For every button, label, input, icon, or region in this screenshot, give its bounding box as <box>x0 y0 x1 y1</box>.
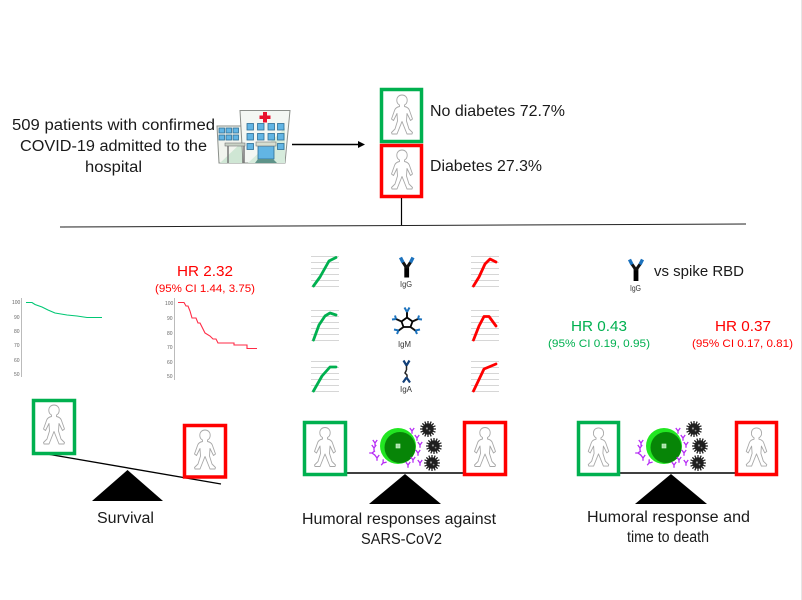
survival chart: diabetes: 50 <box>167 374 173 380</box>
hazard ratio: survival <box>155 263 255 295</box>
caption: survival: Survival <box>97 510 154 527</box>
patient box: diabetes <box>382 146 422 196</box>
survival chart: diabetes: 70 <box>167 345 173 351</box>
icon: IgA antibody: IgA <box>400 385 413 394</box>
icon: hospital <box>217 110 290 163</box>
connector lines <box>60 198 746 227</box>
hazard ratio: diabetes: HR 0.37 <box>715 318 771 335</box>
icon: IgA antibody <box>400 360 413 394</box>
intro text: patient cohort: hospital <box>85 159 142 176</box>
survival chart: no diabetes: 100 <box>12 300 21 306</box>
icon: IgG vs spike RBD <box>630 260 642 293</box>
arrow: to patient groups <box>292 141 365 148</box>
survival chart: no diabetes <box>12 298 102 378</box>
intro text: patient cohort: COVID-19 admitted to the <box>20 138 207 155</box>
hazard ratio: no diabetes: (95% CI 0.19, 0.95) <box>548 338 650 350</box>
seesaw: time to death <box>578 421 776 504</box>
survival chart: diabetes: 60 <box>167 360 173 366</box>
hazard ratio: survival: HR 2.32 <box>177 263 233 280</box>
icon: IgG antibody <box>400 258 413 289</box>
icon: IgG antibody: IgG <box>400 280 412 289</box>
sparklines: diabetes <box>471 256 499 392</box>
hazard ratio: diabetes <box>692 318 793 350</box>
label: no diabetes share: No diabetes 72.7% <box>430 103 565 120</box>
hazard ratio: no diabetes <box>548 318 650 350</box>
icon: IgM antibody: IgM <box>398 340 411 349</box>
caption: humoral responses: SARS-CoV2 <box>361 531 442 548</box>
seesaw: humoral responses <box>304 421 506 504</box>
icon: IgM antibody <box>392 308 422 349</box>
page edge <box>800 0 802 600</box>
hazard ratio: survival: (95% CI 1.44, 3.75) <box>155 283 255 295</box>
hazard ratio: diabetes: (95% CI 0.17, 0.81) <box>692 338 793 350</box>
caption: time to death <box>587 509 750 546</box>
survival chart: diabetes: 80 <box>167 331 173 337</box>
caption: time to death: time to death <box>627 529 709 546</box>
survival chart: no diabetes: 50 <box>14 372 20 378</box>
intro text: patient cohort: 509 patients with confirmed <box>12 117 215 134</box>
label: diabetes share: Diabetes 27.3% <box>430 158 542 175</box>
label: vs spike RBD: vs spike RBD <box>654 263 744 280</box>
caption: humoral responses: Humoral responses against <box>302 511 497 528</box>
caption: time to death: Humoral response and <box>587 509 750 526</box>
survival chart: no diabetes: 80 <box>14 329 20 335</box>
icon: B cell with antibodies <box>635 428 688 468</box>
hazard ratio: no diabetes: HR 0.43 <box>571 318 627 335</box>
intro text: patient cohort <box>12 117 215 176</box>
icon: virus particles <box>686 421 708 471</box>
seesaw: survival <box>34 400 226 501</box>
survival chart: diabetes: 100 <box>165 301 174 307</box>
survival chart: no diabetes: 60 <box>14 358 20 364</box>
icon: virus particles <box>420 421 442 471</box>
icon: IgG vs spike RBD: IgG <box>630 284 641 293</box>
survival chart: diabetes <box>165 298 257 380</box>
patient box: no diabetes <box>382 90 422 142</box>
icon: B cell with antibodies <box>369 428 422 468</box>
sparklines: no diabetes <box>311 256 339 392</box>
survival chart: no diabetes: 90 <box>14 315 20 321</box>
caption: humoral responses <box>302 511 497 548</box>
survival chart: no diabetes: 70 <box>14 343 20 349</box>
survival chart: diabetes: 90 <box>167 316 173 322</box>
